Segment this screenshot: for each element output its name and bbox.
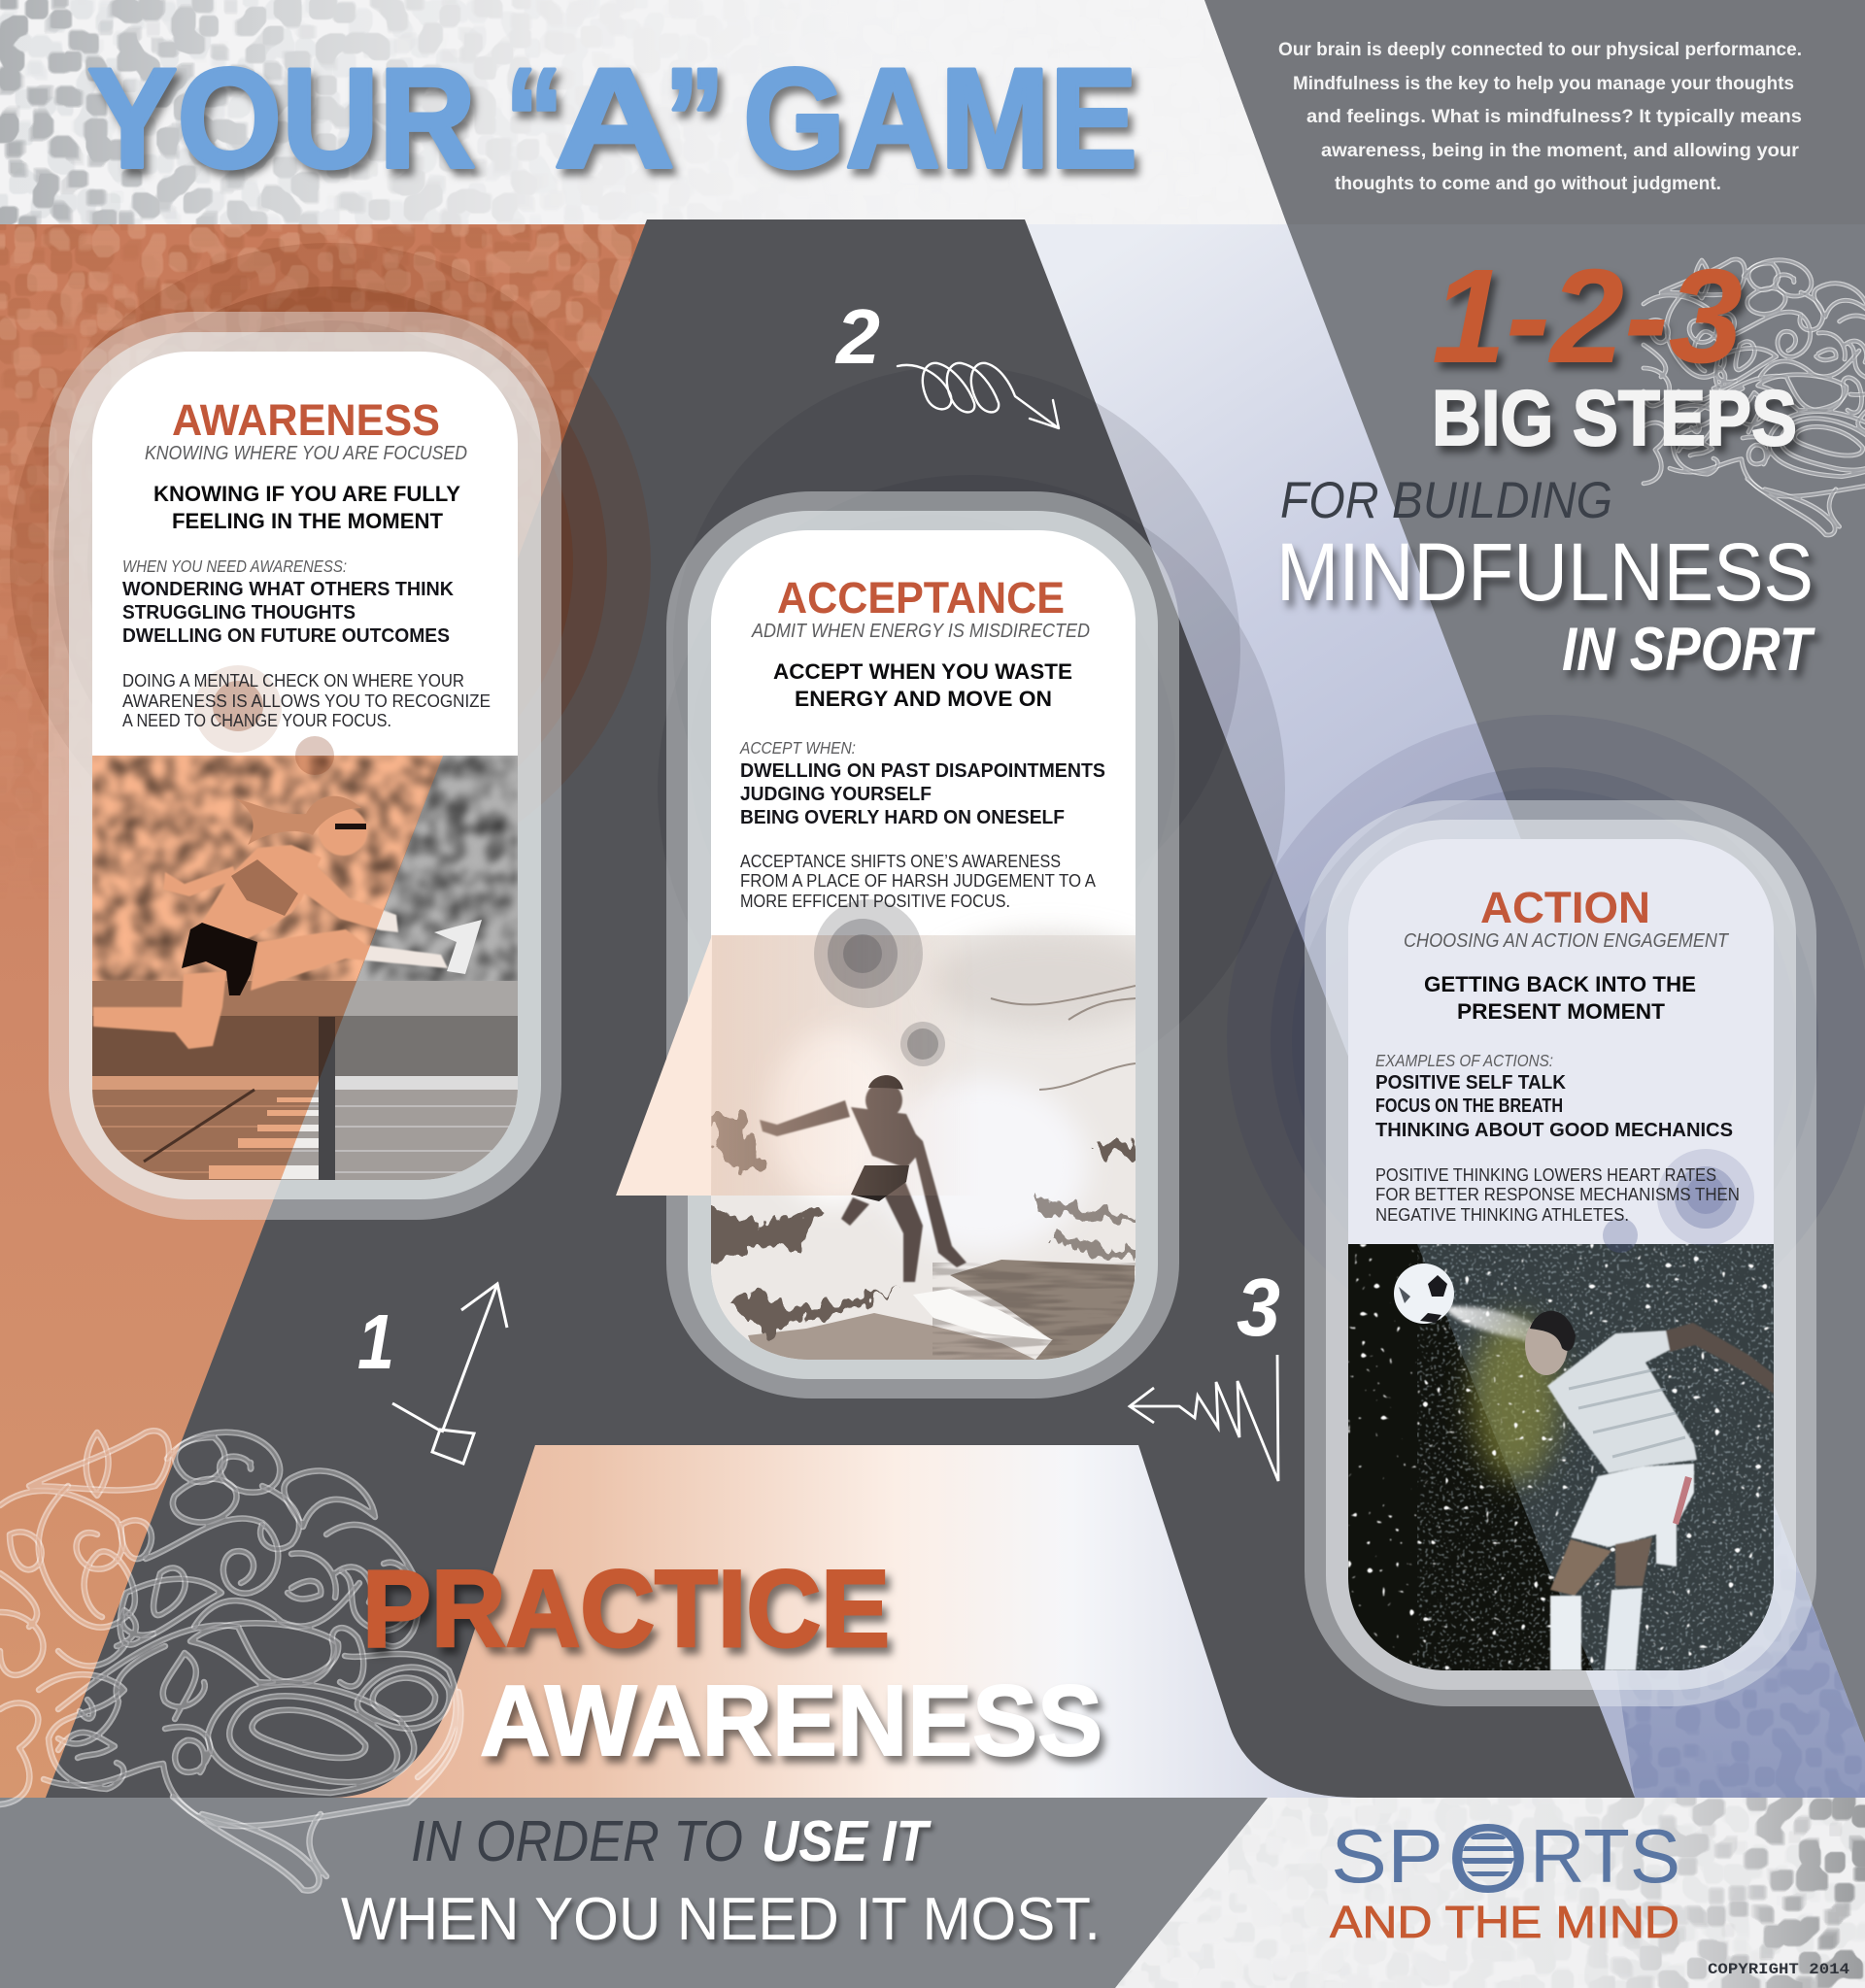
halo: card 3 <box>1227 715 1865 1360</box>
text: examples of actions: THINKING ABOUT GOOD MECHANICS <box>1375 1120 1733 1141</box>
text: when you need it most: WHEN YOU NEED IT MOST. <box>341 1886 1101 1953</box>
logo: sports and the mind: RTS <box>1530 1813 1680 1899</box>
small circles <box>1603 1149 1754 1253</box>
icon: brain outline, top right <box>1644 259 1865 535</box>
text: accept when <box>739 738 1105 828</box>
small circles <box>194 665 334 775</box>
title: YOUR <box>87 39 476 197</box>
text: action subhead: CHOOSING AN ACTION ENGAGEMENT <box>1404 930 1730 952</box>
text: acceptance subhead: ADMIT WHEN ENERGY IS MISDIRECTED <box>751 621 1090 642</box>
photo: soccer player <box>1348 1244 1774 1670</box>
orange tint over photo <box>92 756 443 1180</box>
panel: top banner <box>0 0 1287 224</box>
panel: acceptance card <box>616 491 1179 1398</box>
step number 2 with arrow <box>834 293 1059 428</box>
text: acceptance explanation <box>740 851 1097 911</box>
text: acceptance explanation: FROM A PLACE OF HARSH JUDGEMENT TO A <box>740 870 1097 891</box>
heading: practice: PRACTICE <box>362 1548 890 1669</box>
step number 1 with arrow <box>357 1284 507 1464</box>
text block: intro: and feelings. What is mindfulness? It typically means <box>1306 106 1802 127</box>
panel: letter A dark shape <box>46 219 1635 1798</box>
text block: intro: awareness, being in the moment, and allowing your <box>1321 140 1799 161</box>
title: ” <box>664 39 725 197</box>
panel: bottom right logo area <box>1115 1798 1865 1988</box>
title <box>87 39 1137 197</box>
triangle: A counter <box>616 935 712 1196</box>
text block: intro: Our brain is deeply connected to our physical performance. <box>1278 39 1802 60</box>
halo: card 2 <box>658 366 1285 1102</box>
photo: surfer <box>711 911 1136 1360</box>
logo: sports and the mind: AND THE MIND <box>1330 1897 1679 1947</box>
text: action explanation: FOR BETTER RESPONSE MECHANISMS THEN <box>1375 1184 1740 1204</box>
heading: awareness: AWARENESS <box>480 1665 1102 1776</box>
text: awareness subhead: KNOWING WHERE YOU ARE FOCUSED <box>145 443 467 464</box>
text: action key message: GETTING BACK INTO THE <box>1424 972 1696 996</box>
text: awareness explanation: A NEED TO CHANGE YOUR FOCUS. <box>122 710 391 730</box>
icon: logo O globe <box>1452 1824 1524 1893</box>
small circles <box>814 899 945 1066</box>
text: awareness explanation <box>122 670 491 730</box>
text: action explanation: POSITIVE THINKING LOWERS HEART RATES <box>1375 1164 1716 1185</box>
text: accept when: DWELLING ON PAST DISAPOINTMENTS <box>740 760 1105 782</box>
text: acceptance explanation: MORE EFFICENT POSITIVE FOCUS. <box>740 891 1010 911</box>
title: GAME <box>743 39 1137 197</box>
panel: bottom grey band <box>0 1798 1268 1988</box>
text: acceptance key message: ENERGY AND MOVE ON <box>795 687 1052 711</box>
text: action explanation: NEGATIVE THINKING ATHLETES. <box>1375 1204 1629 1225</box>
text: awareness key message: FEELING IN THE MOMENT <box>172 509 444 533</box>
text: action explanation <box>1375 1164 1740 1225</box>
text: accept when: BEING OVERLY HARD ON ONESELF <box>740 807 1065 828</box>
text: acceptance key message: ACCEPT WHEN YOU WASTE <box>773 659 1072 684</box>
text block: intro <box>1278 39 1802 194</box>
text: acceptance key message <box>773 659 1072 711</box>
icon: logo O globe: O <box>1447 1804 1529 1913</box>
text: examples of actions: POSITIVE SELF TALK <box>1375 1072 1567 1094</box>
title: A <box>554 39 675 197</box>
text: in order to: IN ORDER TO <box>411 1809 743 1873</box>
text: acceptance heading: ACCEPTANCE <box>777 573 1065 623</box>
heading: for building: FOR BUILDING <box>1280 472 1612 529</box>
text: when you need awareness: WONDERING WHAT OTHERS THINK <box>122 579 455 600</box>
title: “ <box>505 39 563 197</box>
panel: awareness card <box>49 312 561 1220</box>
text block: intro: thoughts to come and go without judgment. <box>1335 173 1721 194</box>
heading: in sport: IN SPORT <box>1562 616 1815 684</box>
text: accept when: ACCEPT WHEN: <box>739 738 856 758</box>
heading: 1-2-3 big steps for building mindfulness in sport <box>1276 242 1815 684</box>
panel: lavender diagonal <box>1025 224 1865 1798</box>
photo: hurdler <box>92 756 518 1182</box>
step number 3 with arrow: 3 <box>1237 1262 1280 1353</box>
text: action key message: PRESENT MOMENT <box>1457 999 1666 1024</box>
logo: sports and the mind <box>1329 1824 1678 1938</box>
text: awareness explanation: AWARENESS IS ALLOWS YOU TO RECOGNIZE <box>122 691 491 711</box>
text: copyright: COPYRIGHT 2014 <box>1708 1961 1849 1978</box>
text block: intro: Mindfulness is the key to help you manage your thoughts <box>1293 73 1794 94</box>
text: when you need awareness: STRUGGLING THOUGHTS <box>122 602 356 623</box>
heading: mindfulness: MINDFULNESS <box>1276 526 1814 618</box>
text: awareness explanation: DOING A MENTAL CHECK ON WHERE YOUR <box>122 670 464 691</box>
icon: soccer ball <box>1394 1264 1454 1324</box>
text: accept when: JUDGING YOURSELF <box>740 784 932 805</box>
panel: orange side <box>0 224 647 1798</box>
text: action heading: ACTION <box>1480 883 1650 932</box>
logo: sports and the mind: SP <box>1331 1813 1443 1899</box>
text: examples of actions: EXAMPLES OF ACTIONS: <box>1375 1051 1553 1070</box>
text: awareness key message: KNOWING IF YOU ARE FULLY <box>153 482 460 506</box>
heading: big steps: BIG STEPS <box>1432 375 1797 462</box>
text: examples of actions <box>1375 1051 1733 1141</box>
text: when you need awareness <box>122 556 455 647</box>
panel: upper right grey <box>1204 0 1865 224</box>
halo: card 1 <box>10 243 651 884</box>
text: when you need awareness: DWELLING ON FUTURE OUTCOMES <box>122 625 450 647</box>
text: use it: USE IT <box>762 1809 932 1873</box>
text: action key message <box>1424 972 1696 1024</box>
text: when you need awareness: WHEN YOU NEED AWARENESS: <box>122 556 347 576</box>
step number 3 with arrow <box>1130 1262 1280 1481</box>
panel: action card <box>1305 800 1816 1706</box>
text: awareness key message <box>153 482 460 533</box>
heading: 1-2-3: 1-2-3 <box>1432 242 1743 391</box>
halos behind cards <box>10 243 1865 1360</box>
icon: brain outline, bottom left <box>0 1431 460 1891</box>
panel: A crossbar gradient <box>330 1445 1360 1798</box>
text: awareness heading: AWARENESS <box>172 395 440 445</box>
step number 1 with arrow: 1 <box>357 1298 394 1385</box>
step number 2 with arrow: 2 <box>834 293 880 380</box>
text: examples of actions: FOCUS ON THE BREATH <box>1375 1095 1563 1117</box>
text: acceptance explanation: ACCEPTANCE SHIFTS ONE’S AWARENESS <box>740 851 1061 871</box>
